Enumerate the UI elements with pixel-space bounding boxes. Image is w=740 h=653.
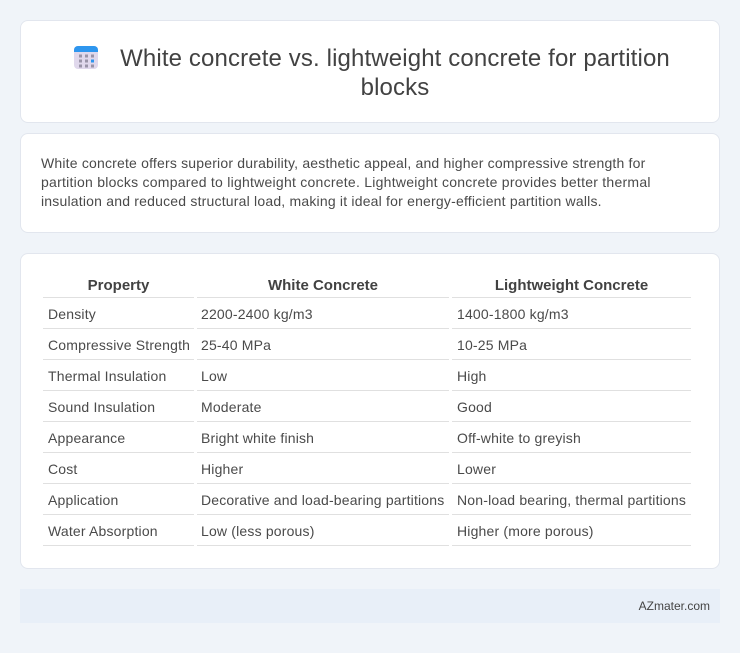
panel: title card	[20, 20, 720, 123]
comparison table: Application	[48, 492, 118, 508]
comparison table: Low	[201, 368, 227, 384]
comparison table: 1400-1800 kg/m3	[457, 306, 569, 322]
comparison table: Off-white to greyish	[457, 430, 581, 446]
panel: summary card	[20, 133, 720, 233]
summary text: White concrete offers superior durability, aesthetic appeal, and higher compressive strength for	[41, 155, 645, 171]
comparison table: Low (less porous)	[201, 523, 315, 539]
comparison table: Non-load bearing, thermal partitions	[457, 492, 686, 508]
comparison table: 2200-2400 kg/m3	[201, 306, 313, 322]
comparison table: Moderate	[201, 399, 262, 415]
comparison table: Good	[457, 399, 492, 415]
title: White concrete vs. lightweight concrete for partition	[120, 45, 670, 72]
comparison table: Thermal Insulation	[48, 368, 166, 384]
comparison table: Lightweight Concrete	[495, 277, 648, 294]
footer bar	[20, 589, 720, 623]
comparison table: 10-25 MPa	[457, 337, 527, 353]
icon: calendar	[74, 46, 98, 69]
comparison table: Density	[48, 306, 96, 322]
summary text: insulation and reduced structural load, making it ideal for energy-efficient partition walls.	[41, 193, 602, 209]
title: blocks	[361, 74, 429, 101]
comparison table: High	[457, 368, 487, 384]
summary text	[41, 155, 651, 209]
comparison table: Appearance	[48, 430, 125, 446]
comparison table	[43, 277, 691, 546]
comparison table: 25-40 MPa	[201, 337, 271, 353]
comparison table: Higher (more porous)	[457, 523, 594, 539]
comparison table: Decorative and load-bearing partitions	[201, 492, 444, 508]
panel: table card	[20, 253, 720, 569]
comparison table: Sound Insulation	[48, 399, 155, 415]
footer text: AZmater.com	[639, 599, 710, 613]
comparison table: Compressive Strength	[48, 337, 190, 353]
comparison table: Cost	[48, 461, 78, 477]
comparison table: Bright white finish	[201, 430, 314, 446]
comparison table: Property	[88, 277, 149, 294]
title	[120, 45, 670, 101]
comparison table: Higher	[201, 461, 243, 477]
comparison table: Lower	[457, 461, 496, 477]
summary text: partition blocks compared to lightweight concrete. Lightweight concrete provides better thermal	[41, 174, 651, 190]
comparison table: Water Absorption	[48, 523, 158, 539]
comparison table: White Concrete	[268, 277, 378, 294]
